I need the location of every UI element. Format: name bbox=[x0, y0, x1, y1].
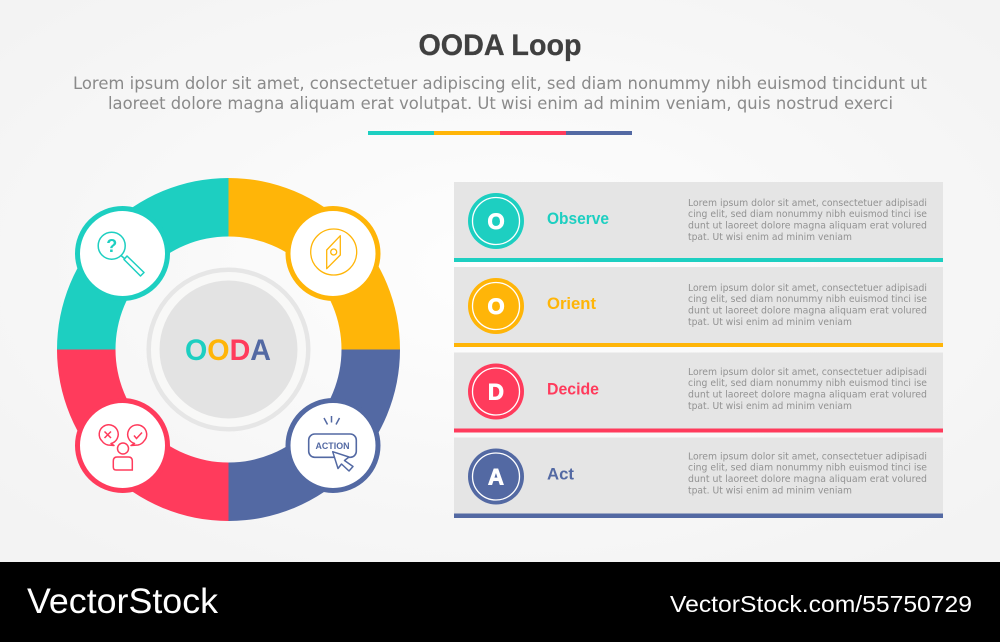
label: observe: Observe bbox=[547, 209, 609, 228]
description: decide: cing elit, sed diam nonummy nibh euismod tinci ise bbox=[688, 378, 927, 389]
title: OODA Loop bbox=[418, 29, 582, 62]
ring segment: orient bbox=[228, 178, 400, 350]
ring segment: observe bbox=[57, 178, 228, 350]
description: observe: cing elit, sed diam nonummy nibh euismod tinci ise bbox=[688, 209, 927, 220]
description: observe bbox=[688, 198, 927, 243]
description: act: tpat. Ut wisi enim ad minim veniam bbox=[688, 486, 852, 496]
panel: orient bbox=[454, 267, 943, 347]
label: decide: Decide bbox=[547, 380, 599, 398]
ring segment: decide bbox=[57, 350, 228, 521]
center label: OODA bbox=[185, 334, 271, 367]
badge: observe bbox=[468, 193, 524, 249]
description: act bbox=[688, 452, 927, 496]
footer band bbox=[0, 562, 1000, 642]
description: orient bbox=[688, 283, 927, 328]
icon: action button bbox=[288, 400, 378, 490]
description: orient: dunt ut laoreet dolore magna aliquam erat volured bbox=[688, 306, 927, 316]
description: decide bbox=[688, 367, 927, 412]
badge: act: A bbox=[488, 464, 504, 490]
badge: decide: D bbox=[488, 380, 504, 404]
badge: orient: O bbox=[487, 294, 505, 319]
description: decide: tpat. Ut wisi enim ad minim veniam bbox=[688, 401, 852, 412]
panel: decide bbox=[454, 352, 943, 432]
title divider bar bbox=[368, 131, 632, 135]
description: orient: cing elit, sed diam nonummy nibh euismod tinci ise bbox=[688, 294, 927, 305]
footer logo: VectorStock bbox=[27, 582, 219, 621]
description: act: dunt ut laoreet dolore magna aliquam erat volured bbox=[688, 474, 927, 485]
icon: action button: ACTION bbox=[316, 441, 350, 452]
description: act: cing elit, sed diam nonummy nibh euismod tinci ise bbox=[688, 462, 927, 474]
badge: decide bbox=[468, 364, 524, 420]
panel: act bbox=[454, 438, 943, 518]
panel: observe bbox=[454, 182, 943, 262]
badge: orient bbox=[468, 278, 524, 334]
subtitle text: Lorem ipsum dolor sit amet, consectetuer adipiscing elit, sed diam nonummy nibh euismod tincidunt ut bbox=[73, 74, 928, 93]
description: decide: dunt ut laoreet dolore magna aliquam erat volured bbox=[688, 390, 927, 400]
description: orient: Lorem ipsum dolor sit amet, consectetuer adipisadi bbox=[688, 283, 927, 294]
badge: act bbox=[468, 448, 524, 504]
footer image id: VectorStock.com/55750729 bbox=[670, 591, 972, 617]
badge: observe: O bbox=[487, 209, 505, 234]
description: observe: dunt ut laoreet dolore magna aliquam erat volured bbox=[688, 220, 927, 232]
description: decide: Lorem ipsum dolor sit amet, consectetuer adipisadi bbox=[688, 367, 927, 378]
ring segment: act bbox=[228, 350, 400, 521]
OODA ring diagram bbox=[57, 178, 400, 521]
center hub bbox=[149, 270, 308, 429]
description: orient: tpat. Ut wisi enim ad minim veniam bbox=[688, 317, 852, 328]
subtitle text: laoreet dolore magna aliquam erat volutpat. Ut wisi enim ad minim veniam, quis nostrud exerci bbox=[108, 94, 893, 113]
icon: compass bbox=[288, 208, 378, 298]
icon: person deciding bbox=[78, 400, 168, 490]
icon: magnifier with question mark: ? bbox=[106, 236, 117, 256]
label: act: Act bbox=[547, 464, 574, 484]
description: observe: Lorem ipsum dolor sit amet, consectetuer adipisadi bbox=[688, 198, 927, 209]
icon: magnifier with question mark bbox=[78, 208, 168, 298]
description: observe: tpat. Ut wisi enim ad minim veniam bbox=[688, 232, 852, 243]
label: orient: Orient bbox=[547, 294, 596, 313]
subtitle text bbox=[73, 74, 928, 113]
description: act: Lorem ipsum dolor sit amet, consectetuer adipisadi bbox=[688, 452, 927, 462]
